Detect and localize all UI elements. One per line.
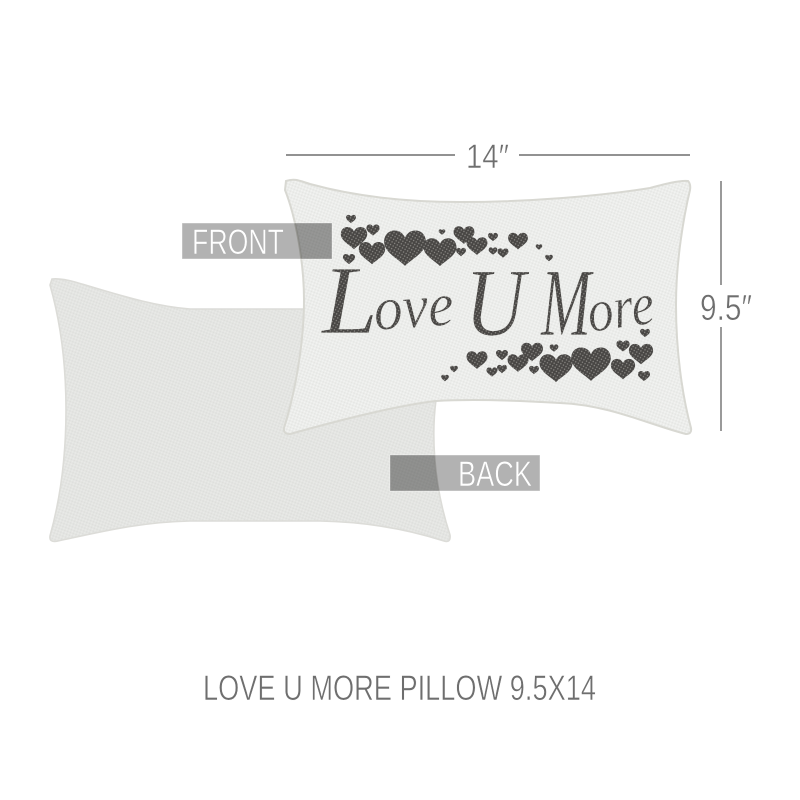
label: BACK: BACK: [458, 455, 532, 494]
pillow lettering: Love U More: M: [540, 249, 594, 356]
caption: LOVE U MORE PILLOW 9.5X14: [203, 669, 596, 708]
pillow lettering: Love U More: [320, 247, 658, 356]
label: FRONT: FRONT: [192, 223, 284, 262]
height dimension: 9.5 inches: 9.5″: [700, 287, 752, 328]
label: BACK: [390, 455, 540, 494]
width dimension: 14 inches: 14″: [466, 138, 509, 176]
pillow lettering: Love U More: L: [320, 247, 378, 355]
pillow lettering: Love U More: ove: [371, 271, 456, 344]
infographic canvas: [49, 144, 752, 700]
back pillow: [50, 279, 450, 541]
front pillow: [284, 180, 691, 434]
hearts: lower cluster: [441, 328, 654, 382]
pillow lettering: Love U More: U: [465, 249, 530, 356]
pillow lettering: Love U More: ore: [583, 270, 658, 345]
hearts: upper cluster: [340, 214, 553, 266]
